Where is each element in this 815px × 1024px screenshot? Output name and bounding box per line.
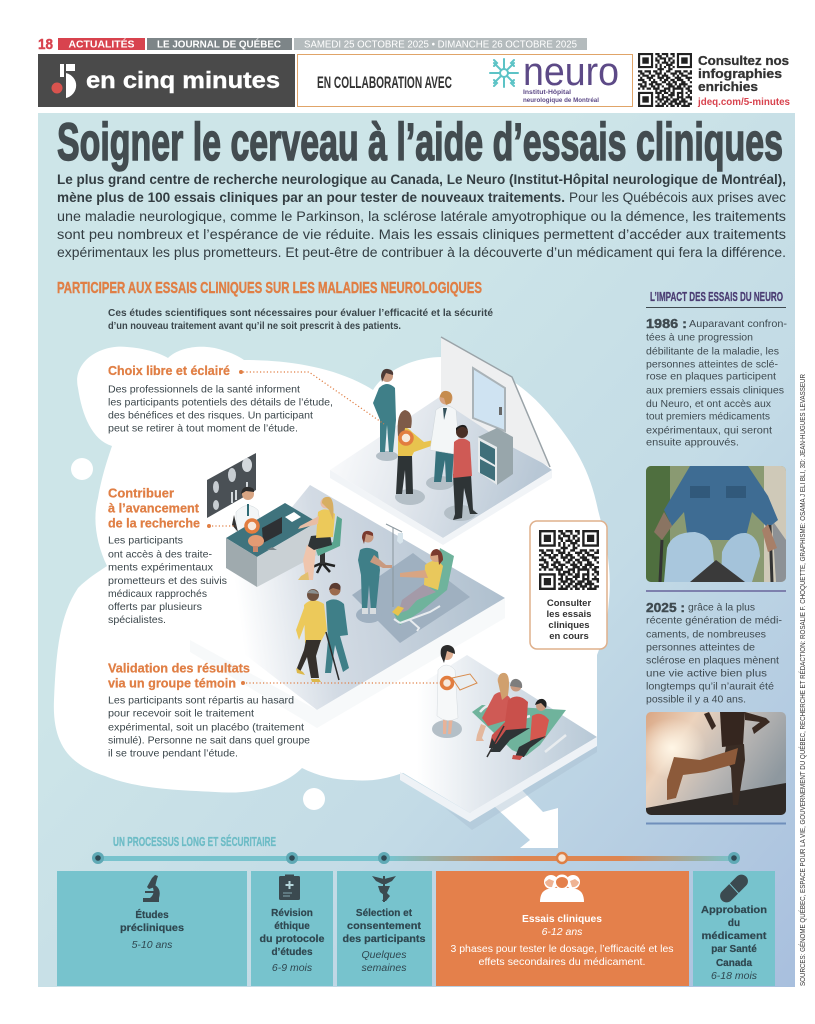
- sidebar text: 2025: sclérose en plaques mènent: [646, 654, 779, 666]
- sidebar text: 1986: personnes atteintes de sclé-: [646, 358, 779, 370]
- callout: contribute to research: à l’avancement: [108, 502, 200, 516]
- sidebar text: 2025: personnes atteintes de: [646, 642, 755, 654]
- call to action: consult infographics: Consultez nos: [698, 54, 789, 68]
- intro paragraph: expérimentaux les plus prometteurs. Et peut-être de contribuer à la découverte d’un médicament qui fera la différence.: [57, 245, 786, 260]
- step: clinical trials: 3 phases pour tester le dosage, l’efficacité et les: [450, 943, 674, 955]
- doctor: [426, 391, 460, 490]
- sidebar text: 2025: longtemps qu’il n’aurait été: [646, 680, 774, 692]
- QR card: ongoing trials: [530, 521, 607, 649]
- sidebar text: 2025: possible il y a 40 ans.: [646, 694, 746, 706]
- marker ring: [246, 520, 258, 532]
- step: ethics review: Révision: [271, 908, 313, 919]
- callout: contribute to research: ont accès à des traite-: [108, 548, 212, 560]
- patient in infusion chair: [392, 548, 454, 631]
- section intro text: d’un nouveau traitement avant qu’il ne soit prescrit à des patients.: [108, 320, 401, 332]
- sidebar text: 2025: [646, 600, 783, 706]
- callout: control group validation: expérimental, soit un placébo (traitement: [108, 722, 304, 734]
- neuro logo: [490, 50, 619, 104]
- room 1: informed consent: [330, 337, 552, 545]
- photo: man in wheelchair: [646, 466, 786, 582]
- seated patient: [298, 497, 342, 580]
- icon: microscope: [143, 875, 160, 902]
- page folio bar: LE JOURNAL DE QUÉBEC: [157, 38, 281, 50]
- callout: free and informed choice: des bénéfices et des risques. Un participant: [108, 410, 313, 422]
- neuro logo: neurologique de Montréal: [523, 98, 599, 104]
- callout: contribute to research: ments expérimentaux: [108, 562, 214, 574]
- step: ethics review: éthique: [274, 921, 310, 932]
- intro paragraph: une maladie neurologique, comme le Parkinson, la sclérose latérale amyotrophique ou la démence, les traitements: [57, 209, 786, 224]
- patient walking with nurse: [296, 583, 349, 682]
- callout: control group validation: simulé). Personne ne sait dans quel groupe: [108, 734, 310, 746]
- banner: en cinq minutes: [38, 54, 295, 107]
- page folio bar: 18: [38, 36, 53, 53]
- timeline heading: UN PROCESSUS LONG ET SÉCURITAIRE: [113, 834, 276, 849]
- sidebar text: 1986: Auparavant confron-: [689, 318, 788, 330]
- sidebar text: 1986: tées à une progression: [646, 332, 753, 344]
- banner: en cinq minutes: en cinq minutes: [86, 67, 280, 93]
- callout: contribute to research: médicaux rapprochés: [108, 588, 207, 600]
- icon: caduceus: [372, 876, 396, 902]
- call to action: consult infographics: jdeq.com/5-minutes: [697, 96, 790, 108]
- sidebar text: 1986: aux premiers essais cliniques: [646, 384, 784, 396]
- step: ethics review: du protocole: [260, 934, 325, 945]
- callout: contribute to research: Les participants: [108, 534, 183, 546]
- step: drug approval: médicament: [702, 931, 767, 942]
- callout: free and informed choice: [108, 364, 384, 434]
- sidebar text: 1986: ensuite approuvés.: [646, 436, 739, 448]
- step: clinical trials: Essais cliniques: [522, 913, 602, 925]
- desk: [226, 503, 317, 587]
- child on bench: [512, 699, 549, 760]
- step: selection and consent: consentement: [347, 921, 422, 932]
- section heading: PARTICIPER AUX ESSAIS CLINIQUES SUR LES MALADIES NEUROLOGIQUES: [57, 280, 482, 297]
- callout: contribute to research: Contribuer: [108, 486, 174, 500]
- sidebar text: 1986: débilitante de la maladie, les: [646, 346, 779, 358]
- IV pole: [386, 524, 403, 607]
- sidebar text: 1986: du Neuro, et ont accès aux: [646, 398, 772, 410]
- step: clinical trials: effets secondaires du médicament.: [478, 956, 646, 968]
- divider between eras: [646, 590, 786, 592]
- marker ring: [400, 432, 412, 444]
- step: clinical trials: [436, 871, 689, 986]
- page folio bar: ACTUALITÉS: [68, 38, 135, 50]
- icon: clipboard: [279, 874, 300, 900]
- sidebar text: 2025: grâce à la plus: [688, 602, 755, 614]
- QR code: infographics: [638, 53, 692, 107]
- page folio bar: [38, 36, 587, 53]
- standing nurse: [356, 531, 392, 623]
- step: drug approval: [693, 871, 775, 986]
- step: selection and consent: Quelques: [362, 949, 407, 961]
- call to action: consult infographics: enrichies: [698, 80, 758, 94]
- callout: free and informed choice: Choix libre et éclairé: [108, 364, 230, 378]
- intro paragraph: mène plus de 100 essais cliniques par an pour tester de nouveaux traitements.: [57, 190, 565, 205]
- room 2: treatment: [190, 453, 505, 728]
- doctor with clipboard: [432, 645, 477, 738]
- step: selection and consent: des participants: [342, 934, 426, 945]
- callout: control group validation: il se trouve pendant l’étude.: [108, 748, 238, 760]
- step: clinical trials: 6-12 ans: [542, 926, 583, 938]
- callout: control group validation: [108, 662, 440, 760]
- callout: contribute to research: de la recherche: [108, 516, 200, 530]
- step: drug approval: Canada: [716, 958, 752, 969]
- vertical credits: SOURCES: GÉNOME QUÉBEC, ESPACE POUR LA VIE, GOUVERNEMENT DU QUÉBEC, RECHERCHE ET RÉDACTION: ROSALIE F. CHOQUETTE, GRAPHISME: OSAMA J ELI BLI, 3D: JEAN-HUGUES LEVASSEUR: [798, 374, 807, 986]
- intro paragraph: Le plus grand centre de recherche neurologique au Canada, Le Neuro (Institut-Hôpital neurologique de Montréal),: [57, 172, 786, 187]
- callout: free and informed choice: les participants potentiels des détails de l’étude,: [108, 396, 333, 408]
- white cloud: [54, 347, 610, 815]
- sidebar text: 2025: caments, de nombreuses: [646, 628, 766, 640]
- callout: control group validation: Validation des résultats: [108, 662, 250, 676]
- wall and door: [441, 337, 550, 467]
- step: selection and consent: semaines: [362, 962, 407, 974]
- step: ethics review: [251, 871, 333, 986]
- man in red: [444, 425, 478, 521]
- section intro text: Ces études scientifiques sont nécessaires pour évaluer l’efficacité et la sécurité: [108, 307, 493, 319]
- intro paragraph: sont peu nombreux et l’espérance de vie réduite. Mais les essais cliniques permettent d’accéder aux traitements: [57, 227, 786, 242]
- patient in yellow: [395, 410, 434, 505]
- call to action: consult infographics: [697, 54, 790, 108]
- banner: collaboration with Neuro: [298, 50, 632, 106]
- cabinet: [478, 428, 513, 485]
- step: drug approval: par Santé: [711, 944, 757, 955]
- QR card: ongoing trials: cliniques: [548, 620, 590, 631]
- neuro logo: Institut-Hôpital: [523, 90, 571, 96]
- callout: contribute to research: spécialistes.: [108, 614, 166, 626]
- sidebar text: 2025: une vie active bien plus: [646, 668, 767, 680]
- x-ray panel: [207, 453, 256, 518]
- step: drug approval: Approbation: [701, 905, 767, 916]
- woman on bench: [476, 673, 510, 741]
- step: ethics review: 6-9 mois: [272, 962, 313, 974]
- room 3: control group: [340, 645, 597, 830]
- callout: contribute to research: [108, 486, 236, 626]
- photo: runner at sunset: [638, 712, 786, 815]
- callout: contribute to research: offerts par plusieurs: [108, 601, 202, 613]
- page folio bar: SAMEDI 25 OCTOBRE 2025 • DIMANCHE 26 OCTOBRE 2025: [304, 40, 577, 50]
- callout: control group validation: pour recevoir soit le traitement: [108, 708, 254, 720]
- sidebar text: 1986: [646, 316, 788, 448]
- timeline: [92, 852, 740, 864]
- step: drug approval: du: [728, 918, 740, 929]
- sidebar text: 2025: 2025 :: [646, 600, 685, 615]
- intro paragraph: Pour les Québécois aux prises avec: [569, 190, 786, 205]
- sidebar heading: impact: [646, 289, 786, 308]
- big arrow to timeline: [493, 790, 558, 848]
- marker ring: [442, 678, 452, 688]
- sidebar text: 1986: tout premiers médicaments: [646, 410, 770, 422]
- callout: control group validation: Les participants sont répartis au hasard: [108, 694, 294, 706]
- step: selection and consent: Sélection et: [356, 908, 413, 919]
- QR card: ongoing trials: Consulter: [547, 598, 591, 609]
- icon: participants: [540, 874, 584, 902]
- sidebar text: 1986: 1986 :: [646, 316, 687, 331]
- section intro text: [108, 307, 493, 332]
- step: drug approval: 6-18 mois: [711, 970, 758, 982]
- call to action: consult infographics: infographies: [698, 67, 782, 81]
- callout: control group validation: via un groupe témoin: [108, 676, 236, 690]
- step: ethics review: d’études: [271, 947, 313, 958]
- QR card: ongoing trials: les essais: [547, 609, 591, 620]
- step: preclinical studies: 5-10 ans: [132, 939, 173, 951]
- sidebar closing rule: [646, 822, 786, 824]
- older woman on bench: [487, 679, 530, 757]
- step: preclinical studies: [57, 871, 247, 986]
- waiting bench: [472, 705, 566, 756]
- sidebar text: 1986: rose en plaques participent: [646, 370, 776, 382]
- callout: contribute to research: prometteurs et des suivis: [108, 575, 227, 587]
- doctor at desk: [232, 487, 262, 534]
- main panel background: [38, 113, 795, 987]
- step: preclinical studies: précliniques: [120, 923, 184, 934]
- neuro logo: neuro: [523, 50, 619, 94]
- sidebar text: 2025: récente génération de médi-: [646, 614, 783, 626]
- sidebar text: 1986: expérimentaux, qui seront: [646, 424, 772, 436]
- callout: free and informed choice: peut se retirer à tout moment de l’étude.: [108, 422, 298, 434]
- QR card: ongoing trials: en cours: [549, 631, 589, 642]
- banner: collaboration with Neuro: EN COLLABORATION AVEC: [317, 73, 452, 92]
- callout: free and informed choice: Des professionnels de la santé informent: [108, 384, 300, 396]
- nurse: [373, 369, 398, 461]
- step: selection and consent: [337, 871, 432, 986]
- step: preclinical studies: Études: [135, 908, 169, 921]
- intro paragraph: [57, 172, 786, 260]
- icon: pill: [717, 872, 751, 905]
